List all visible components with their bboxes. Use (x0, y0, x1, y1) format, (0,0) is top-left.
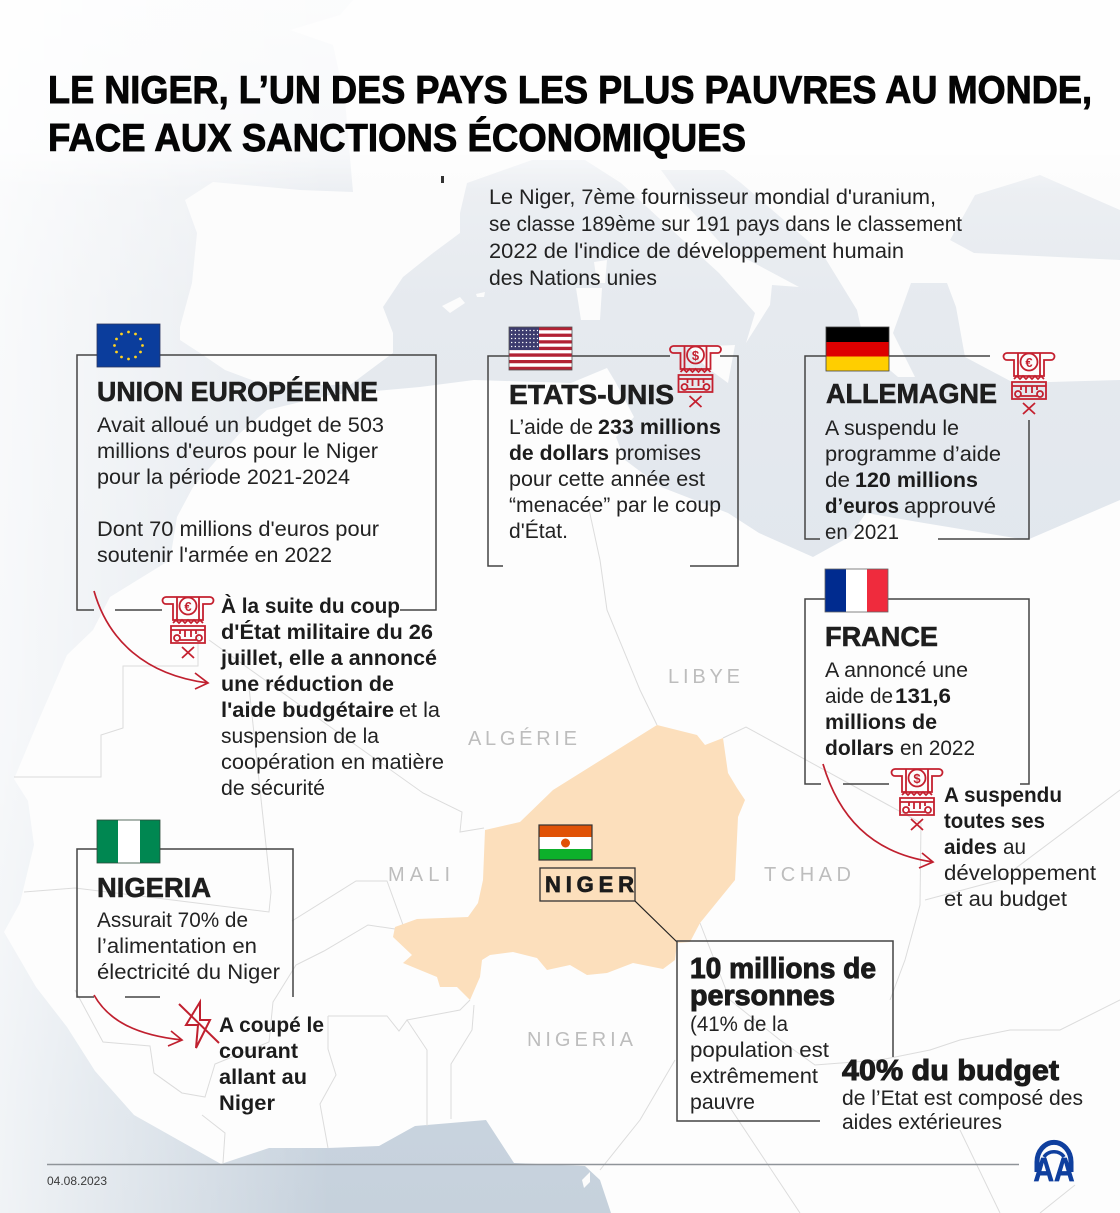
panel: 10 millions de personnes: pauvre (690, 1091, 755, 1114)
panel: 10 millions de personnes: (41% de la (690, 1013, 788, 1036)
map labels: ALGÉRIE (468, 727, 577, 750)
text: France suspension: au (1003, 836, 1026, 859)
panel: Nigeria (77, 820, 293, 997)
body text (825, 417, 1001, 544)
panel: 10 millions de personnes: population est (690, 1039, 829, 1062)
text: EU suspension: coopération en matière (221, 751, 444, 774)
map labels (388, 666, 851, 1051)
body text: A suspendu le (825, 417, 959, 440)
body text: A annoncé une (825, 659, 968, 682)
text: EU suspension: d'État militaire du 26 (221, 621, 433, 644)
panel: 10 millions de personnes: personnes (690, 980, 835, 1012)
arrow: EU (94, 591, 208, 689)
text: EU suspension: l'aide budgétaire (221, 699, 394, 722)
intro text: se classe 189ème sur 191 pays dans le classement (489, 213, 962, 236)
text: France suspension: toutes ses (944, 810, 1045, 833)
body text: électricité du Niger (97, 961, 280, 984)
panel: 10 millions de personnes: extrêmement (690, 1065, 818, 1088)
title (48, 69, 1092, 160)
body text: Dont 70 millions d'euros pour (97, 518, 379, 541)
heading: ETATS-UNIS (509, 379, 674, 410)
icon: dollar cash machine crossed (US): $ (692, 348, 700, 363)
logo: AA: AA (1034, 1151, 1074, 1188)
text: 40% du budget (842, 1055, 1083, 1134)
label: Niger: NIGER (545, 872, 634, 897)
panel: Etats-Unis (488, 327, 738, 566)
text: 40% du budget: 40% du budget (842, 1055, 1059, 1087)
text: Nigeria power cut: A coupé le (219, 1014, 324, 1037)
text: EU suspension: une réduction de (221, 673, 394, 696)
text: Nigeria power cut (219, 1014, 324, 1115)
icon: dollar cash machine crossed (France) (892, 769, 942, 830)
text: Nigeria power cut: allant au (219, 1066, 307, 1089)
text: France suspension: et au budget (944, 888, 1067, 911)
body text: de dollars (509, 442, 609, 465)
text: EU suspension: et la (399, 699, 440, 722)
body text: 120 millions (855, 469, 978, 492)
title: FACE AUX SANCTIONS ÉCONOMIQUES (48, 116, 746, 160)
text: France suspension: aides (944, 836, 997, 859)
intro text: Le Niger, 7ème fournisseur mondial d'uranium, (489, 186, 936, 209)
flag: EU (97, 324, 160, 367)
text: France suspension (944, 784, 1096, 911)
body text: Avait alloué un budget de 503 (97, 414, 384, 437)
arrow: France (823, 764, 933, 868)
footer rule (47, 1164, 1019, 1166)
icon: euro cash machine crossed (EU) (162, 597, 214, 658)
intro text: 2022 de l'indice de développement humain (489, 240, 904, 263)
flag: USA (509, 327, 572, 370)
body text: l’alimentation en (97, 935, 257, 958)
text: Nigeria power cut: Niger (219, 1092, 275, 1115)
body text (825, 659, 975, 760)
leader line (635, 901, 677, 942)
body text: promises (615, 442, 701, 465)
text: 40% du budget: aides extérieures (842, 1111, 1002, 1134)
body text: pour cette année est (509, 468, 705, 491)
arrow: Nigeria (94, 995, 182, 1046)
panel: France (805, 569, 1029, 784)
panel: 10 millions de personnes (677, 941, 893, 1121)
body text: 233 millions (598, 416, 721, 439)
map labels: NIGERIA (527, 1029, 634, 1051)
flag: Nigeria (97, 820, 160, 863)
heading: UNION EUROPÉENNE (97, 376, 378, 407)
body text: programme d’aide (825, 443, 1001, 466)
body text: en 2021 (825, 521, 899, 544)
heading: ALLEMAGNE (826, 378, 997, 409)
text: EU suspension: de sécurité (221, 777, 325, 800)
icon: euro cash machine crossed (Germany) (1004, 353, 1054, 414)
panel: Union européenne (77, 324, 436, 610)
flag: Germany (826, 327, 889, 371)
icon: euro cash machine crossed (Germany): € (1025, 355, 1033, 370)
body text: Assurait 70% de (97, 909, 248, 932)
body text: dollars (825, 737, 894, 760)
heading: FRANCE (825, 621, 938, 652)
body text: soutenir l'armée en 2022 (97, 544, 332, 567)
text: Nigeria power cut: courant (219, 1040, 298, 1063)
panel: 10 millions de personnes: 10 millions de (690, 953, 876, 985)
text: France suspension: A suspendu (944, 784, 1062, 807)
flag: France (825, 569, 888, 612)
body text (97, 909, 280, 984)
icon: dollar cash machine crossed (US) (670, 346, 721, 407)
body text: en 2022 (900, 737, 975, 760)
body text: de (825, 469, 850, 492)
text: EU suspension: juillet, elle a annoncé (220, 647, 437, 670)
date: 04.08.2023 (47, 1174, 107, 1188)
icon: crossed lightning bolt (179, 1002, 219, 1048)
text: EU suspension (220, 595, 444, 800)
body text: millions d'euros pour le Niger (97, 440, 378, 463)
map labels: LIBYE (668, 666, 740, 688)
intro text: des Nations unies (489, 267, 657, 290)
text: EU suspension: suspension de la (221, 725, 379, 748)
body text: pour la période 2021-2024 (97, 466, 350, 489)
text: 40% du budget: de l’Etat est composé des (842, 1087, 1083, 1110)
body text: approuvé (904, 495, 996, 518)
map labels: TCHAD (764, 864, 851, 886)
body text: d’euros (825, 495, 899, 518)
body text: d'État. (509, 520, 568, 543)
flag: Niger (539, 825, 592, 860)
body text: 131,6 (895, 685, 951, 708)
heading: NIGERIA (97, 872, 211, 903)
body text: “menacée” par le coup (509, 494, 721, 517)
body text: aide de (825, 685, 893, 708)
text: EU suspension: À la suite du coup (221, 595, 400, 618)
body text: millions de (825, 711, 937, 734)
intro text (489, 186, 962, 290)
text: France suspension: développement (944, 862, 1096, 885)
icon: dollar cash machine crossed (France): $ (913, 771, 921, 786)
body text: L’aide de (509, 416, 593, 439)
map labels: MALI (388, 864, 450, 886)
body text (509, 416, 721, 543)
body text (97, 414, 384, 567)
icon: euro cash machine crossed (EU): € (184, 599, 192, 614)
Niger country shape (393, 725, 745, 1000)
panel: Allemagne (805, 327, 1029, 544)
